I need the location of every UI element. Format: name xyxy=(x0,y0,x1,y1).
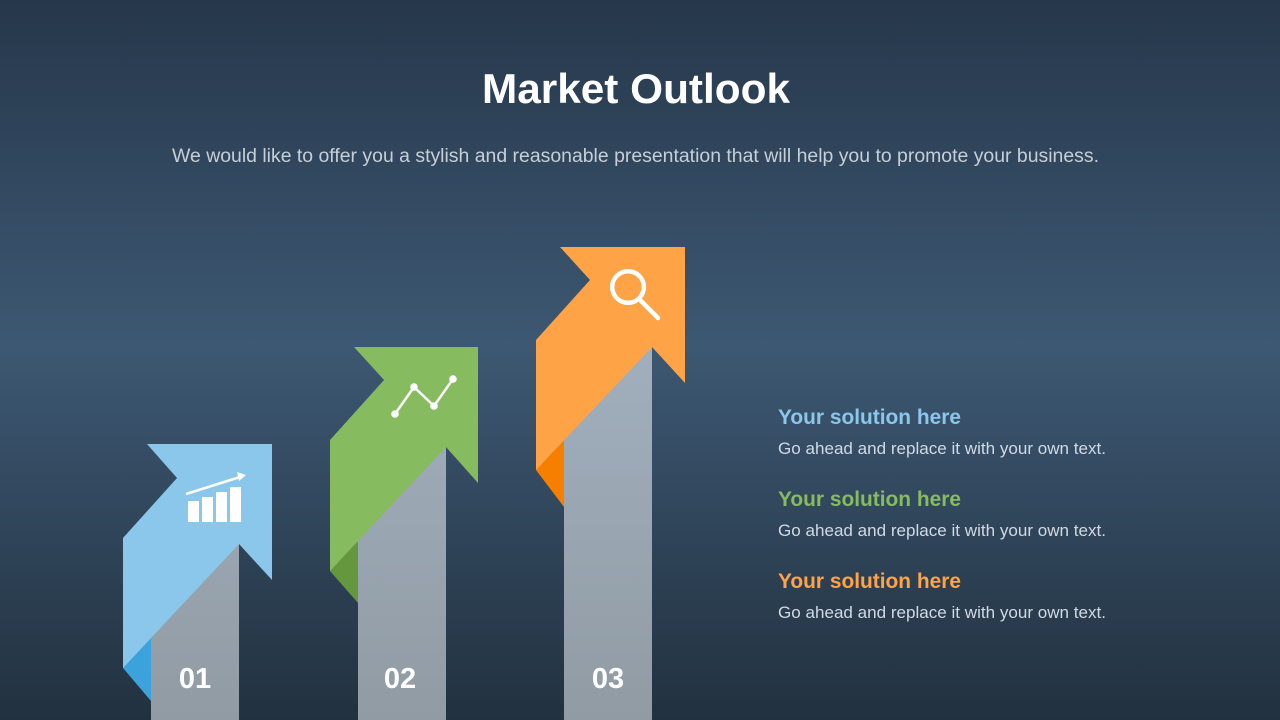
arrow column 03 xyxy=(536,247,685,720)
fold triangle 02 xyxy=(330,531,358,603)
heading 1: Your solution here xyxy=(778,406,961,429)
grey bar 03 xyxy=(564,337,652,720)
icon: bar chart with arrow xyxy=(186,472,246,522)
number 01: 01 xyxy=(179,663,211,695)
icon: magnifying glass xyxy=(612,271,658,318)
heading 3: Your solution here xyxy=(778,570,961,593)
number 02: 02 xyxy=(384,663,416,695)
legend item 1 xyxy=(778,406,1106,458)
fold triangle 01 xyxy=(123,630,151,701)
blue arrow xyxy=(123,444,272,668)
orange arrow xyxy=(536,247,685,470)
fold triangle 03 xyxy=(536,431,564,507)
arrow column 02 xyxy=(330,347,478,720)
number 03: 03 xyxy=(592,663,624,695)
subtitle: We would like to offer you a stylish and reasonable presentation that will help you to promote your business. xyxy=(172,146,1099,167)
legend item 3 xyxy=(778,570,1106,622)
icon: line chart xyxy=(391,375,457,418)
arrow column 01 xyxy=(123,444,272,720)
body text 3: Go ahead and replace it with your own text. xyxy=(778,603,1106,622)
title: Market Outlook xyxy=(482,65,791,112)
heading 2: Your solution here xyxy=(778,488,961,511)
body text 2: Go ahead and replace it with your own text. xyxy=(778,521,1106,540)
body text 1: Go ahead and replace it with your own text. xyxy=(778,439,1106,458)
grey bar 01 xyxy=(151,535,239,720)
grey bar 02 xyxy=(358,437,446,720)
legend item 2 xyxy=(778,488,1106,540)
green arrow xyxy=(330,347,478,571)
